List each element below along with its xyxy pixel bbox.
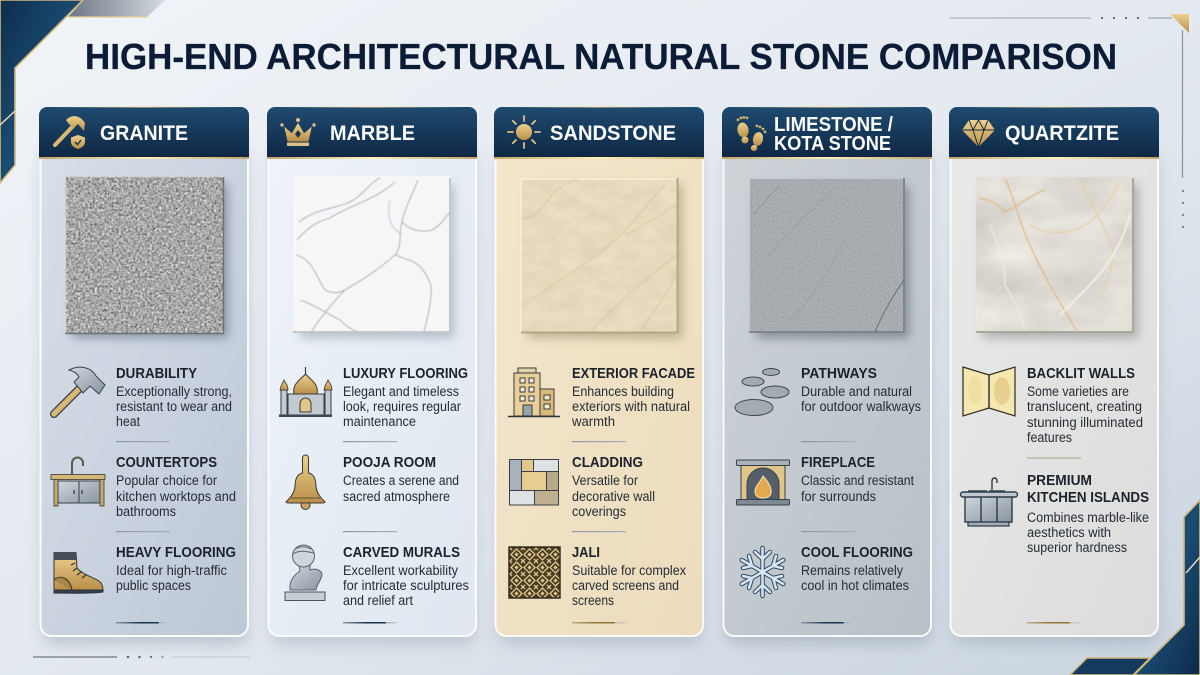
feature: exterior facade: Enhances building (572, 384, 674, 399)
feature: cladding: coverings (572, 504, 626, 519)
feature: jali: screens (572, 593, 614, 608)
feature: luxury flooring: LUXURY FLOORING (343, 365, 468, 382)
feature: pathways: PATHWAYS (801, 365, 877, 382)
feature: countertops (51, 454, 236, 519)
feature: heavy flooring (54, 544, 236, 593)
header label: KOTA STONE (774, 133, 891, 155)
icon: snowflake (742, 548, 783, 596)
icon: bell (286, 455, 325, 510)
icon: sink vanity (51, 458, 105, 506)
feature: cladding: CLADDING (572, 454, 643, 471)
panel: marble (267, 106, 477, 644)
panel: limestone / kota stone (722, 106, 932, 644)
feature: cool flooring: COOL FLOORING (801, 544, 913, 561)
feature: pooja room: Creates a serene and (343, 473, 459, 488)
feature: durability (54, 365, 232, 429)
icon: fireplace (736, 460, 790, 505)
icon: crown (280, 118, 316, 146)
stone sample: marble (293, 176, 454, 338)
feature: durability: DURABILITY (116, 365, 197, 382)
header: granite (39, 106, 249, 159)
feature: durability: heat (116, 414, 140, 429)
feature: fireplace: FIREPLACE (801, 454, 875, 471)
feature: jali: JALI (572, 544, 600, 561)
icon: bust (285, 545, 325, 600)
feature: exterior facade (508, 365, 695, 429)
feature: heavy flooring: public spaces (116, 578, 191, 593)
corner decoration: bottom right (1070, 500, 1200, 675)
icon: cladding tiles (510, 460, 558, 505)
corner accent: top right (950, 14, 1189, 228)
feature: carved murals: and relief art (343, 593, 413, 608)
header: sandstone (494, 106, 704, 159)
icon: stepping stones (735, 368, 789, 416)
icon: sun (508, 116, 540, 148)
stone sample: limestone (749, 178, 909, 338)
feature: backlit walls (963, 365, 1143, 445)
header: limestone (722, 106, 932, 159)
feature: carved murals: Excellent workability (343, 563, 458, 578)
panel: sandstone (494, 106, 704, 644)
feature: cool flooring (742, 544, 913, 596)
header label (774, 114, 893, 155)
header: quartzite (949, 106, 1159, 159)
feature: premium kitchen islands: PREMIUM (1027, 472, 1092, 489)
feature: jali: Suitable for complex (572, 563, 686, 578)
icon: diamond (962, 120, 995, 147)
feature: countertops: bathrooms (116, 504, 176, 519)
feature: luxury flooring: Elegant and timeless (343, 384, 459, 399)
feature: backlit walls: Some varieties are (1027, 384, 1129, 399)
icon: backlit panels (963, 367, 1015, 416)
feature: cladding (510, 454, 655, 519)
feature: durability: resistant to wear and (116, 399, 232, 414)
title: HIGH-END ARCHITECTURAL NATURAL STONE COMPARISON (85, 36, 1117, 77)
header label: GRANITE (100, 122, 188, 145)
feature: exterior facade: warmth (571, 414, 615, 429)
feature: jali: carved screens and (572, 578, 679, 593)
icon: kitchen island (960, 478, 1018, 526)
feature: backlit walls: translucent, creating (1027, 399, 1142, 414)
feature: fireplace (736, 454, 914, 505)
feature: premium kitchen islands: aesthetics with (1027, 525, 1111, 540)
feature: durability: Exceptionally strong, (116, 384, 232, 399)
feature: countertops: Popular choice for (116, 473, 217, 488)
feature: carved murals: for intricate sculptures (343, 578, 469, 593)
header label: QUARTZITE (1005, 122, 1119, 145)
feature: pooja room: POOJA ROOM (343, 454, 436, 471)
icon: hammer and shield (55, 116, 85, 149)
stone sample: sandstone (521, 178, 682, 338)
panel: granite (39, 106, 249, 644)
feature: fireplace: for surrounds (801, 489, 876, 504)
feature: luxury flooring (279, 365, 468, 429)
icon: boot (54, 552, 103, 593)
feature: fireplace: Classic and resistant (801, 473, 914, 488)
feature: carved murals: CARVED MURALS (343, 544, 460, 561)
feature: pathways: Durable and natural (801, 384, 912, 399)
header: marble (267, 106, 477, 159)
feature: exterior facade: exteriors with natural (572, 399, 690, 414)
feature: premium kitchen islands (960, 472, 1149, 555)
feature: premium kitchen islands: KITCHEN ISLANDS (1027, 489, 1149, 506)
feature: luxury flooring: maintenance (343, 414, 416, 429)
stone sample: quartzite (976, 177, 1138, 338)
feature: luxury flooring: look, requires regular (343, 399, 461, 414)
icon: hammer (54, 367, 105, 414)
feature: cool flooring: cool in hot climates (801, 578, 909, 593)
feature: exterior facade: EXTERIOR FACADE (572, 365, 695, 382)
stone sample: granite (65, 176, 228, 338)
feature: cool flooring: Remains relatively (801, 563, 903, 578)
feature: backlit walls: features (1027, 430, 1072, 445)
feature: cladding: Versatile for (572, 473, 638, 488)
feature: countertops: kitchen worktops and (116, 489, 236, 504)
header label: MARBLE (330, 122, 415, 145)
header label: LIMESTONE / (774, 114, 893, 136)
icon: footprints (736, 116, 766, 151)
panel: quartzite (949, 106, 1159, 644)
feature: premium kitchen islands: superior hardness (1027, 540, 1127, 555)
corner decoration: top left (0, 0, 165, 183)
feature: pathways (735, 365, 921, 416)
corner accent: bottom left (33, 656, 250, 658)
header label: SANDSTONE (550, 122, 676, 145)
feature: heavy flooring: HEAVY FLOORING (116, 544, 236, 561)
feature: pathways: for outdoor walkways (801, 399, 921, 414)
icon: palace (279, 367, 332, 417)
icon: jali screen (509, 547, 560, 598)
feature: backlit walls: BACKLIT WALLS (1027, 365, 1135, 382)
feature: countertops: COUNTERTOPS (116, 454, 217, 471)
feature: carved murals (285, 544, 469, 608)
feature: cladding: decorative wall (572, 489, 655, 504)
feature: heavy flooring: Ideal for high-traffic (116, 563, 227, 578)
feature: backlit walls: stunning illuminated (1027, 415, 1143, 430)
feature: premium kitchen islands: Combines marble-like (1027, 510, 1149, 525)
feature: pooja room (286, 454, 459, 510)
feature: pooja room: sacred atmosphere (343, 489, 450, 504)
icon: building (508, 368, 560, 416)
feature: jali (509, 544, 686, 608)
